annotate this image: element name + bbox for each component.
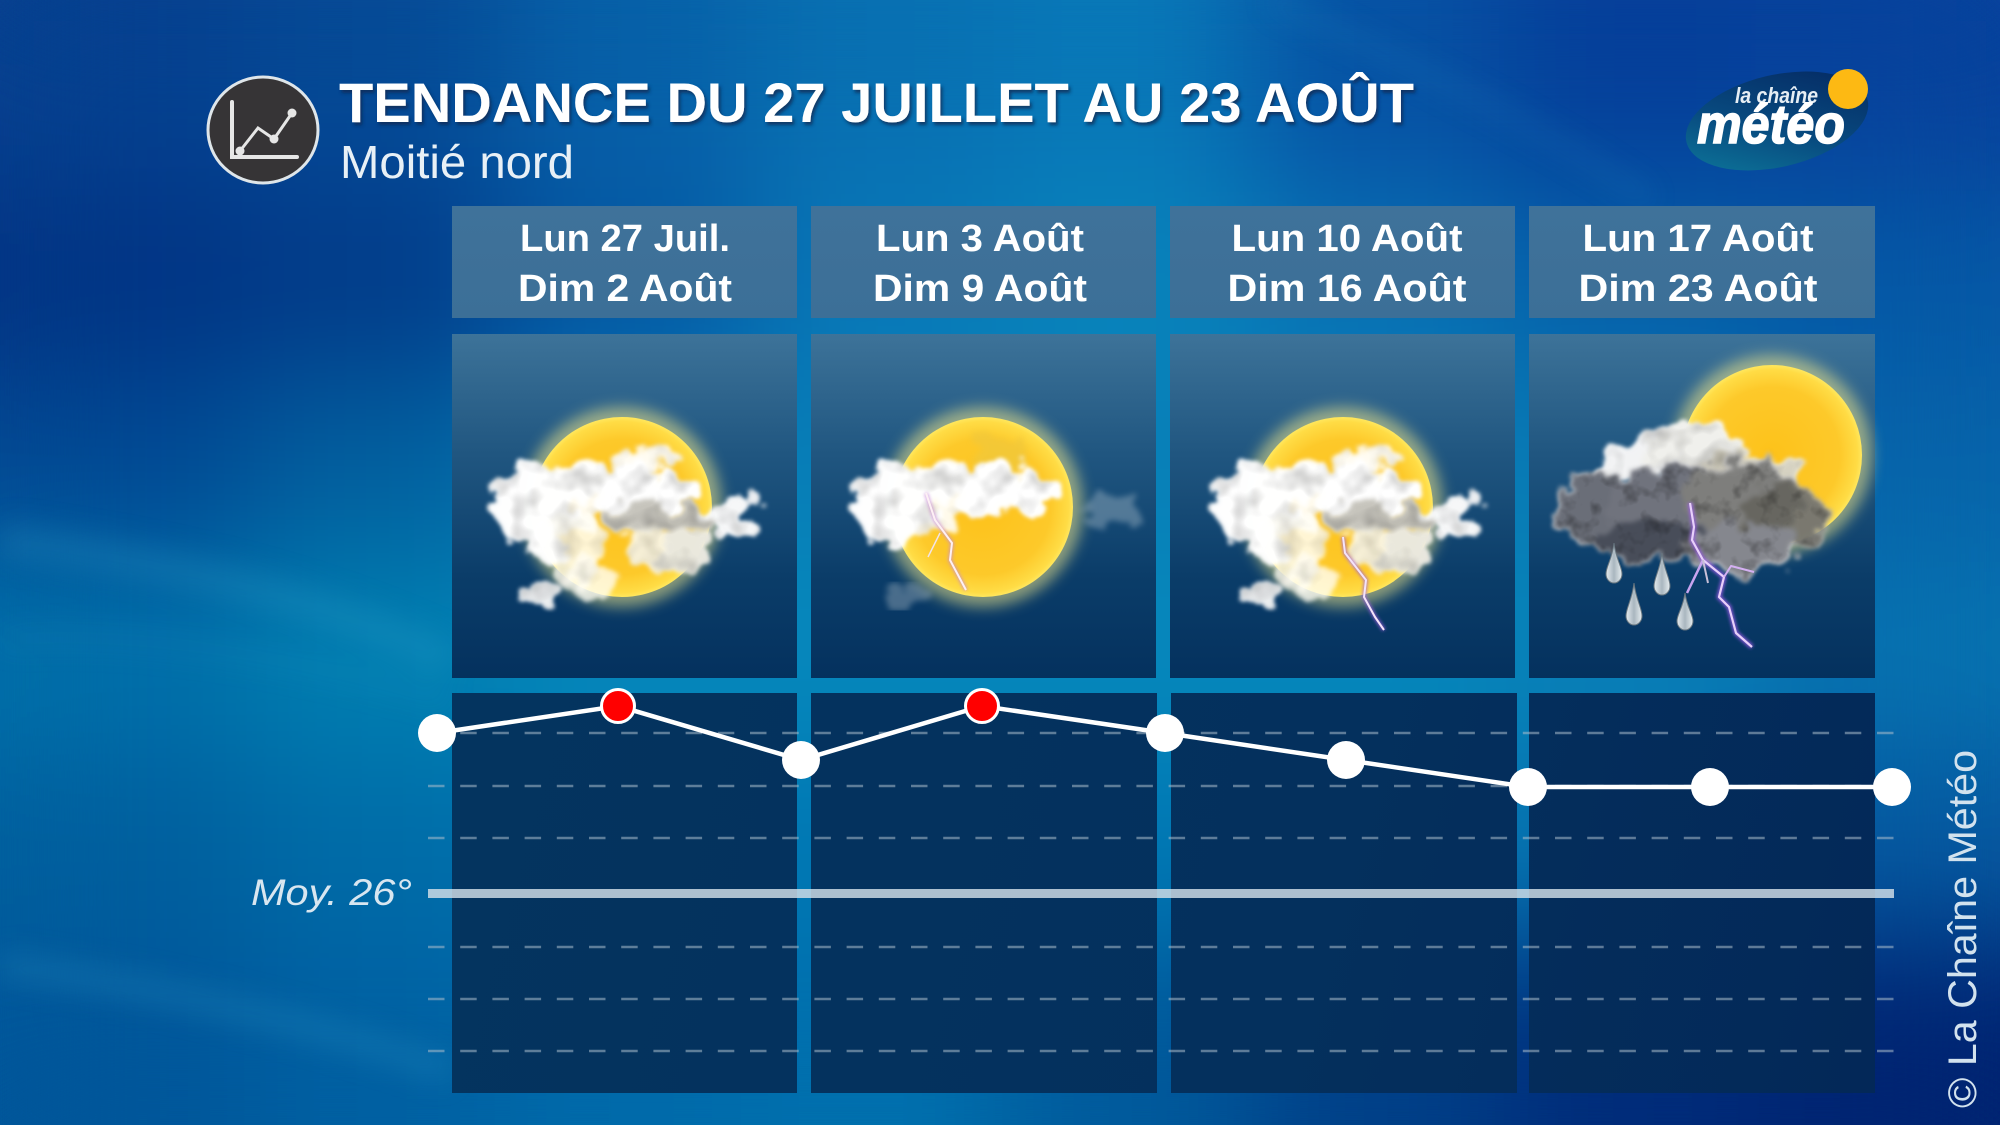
date header: week 4 [1529,206,1875,318]
subtitle: Moitié nord [340,136,574,188]
date header: week 4: Dim 23 Août [1578,268,1818,310]
date header: week 4: Lun 17 Août [1582,218,1814,260]
chart column 3 [1171,693,1517,1093]
trend line [437,706,1892,787]
panel: weather week 3, sun, cloud and lightning [1170,334,1515,678]
date header: week 1 [452,206,797,318]
date header: week 2 [811,206,1156,318]
date header: week 2: Dim 9 Août [873,268,1087,310]
date header: week 3: Dim 16 Août [1228,268,1467,310]
chart column 2 [811,693,1157,1093]
panel: temperature chart [418,690,1911,1093]
date header: week 1: Dim 2 Août [518,268,732,310]
copyright: © La Chaîne Météo [1941,750,1985,1108]
date header: week 1: Lun 27 Juil. [520,218,730,260]
logo: la chaîne météo [1676,55,1878,187]
logo: la chaîne météo: la chaîne [1735,83,1818,108]
panel: weather week 4, sun, storm cloud, rain and lightning [1529,334,1875,678]
panel: weather week 2, sun, cloud and lightning [811,334,1156,678]
date header: week 2: Lun 3 Août [876,218,1084,260]
average line [428,889,1894,898]
icon: trend chart badge [208,77,318,183]
title: TENDANCE DU 27 JUILLET AU 23 AOÛT [339,71,1414,134]
date header: week 3: Lun 10 Août [1232,218,1463,260]
date header: week 3 [1170,206,1515,318]
chart column 1 [452,693,797,1093]
data points [418,690,1911,806]
panel: weather week 1, sun and clouds [452,334,797,678]
chart column 4 [1529,693,1875,1093]
logo: la chaîne météo: météo [1697,93,1845,155]
average label: Moy. 26° [251,872,412,913]
icon: raindrops [1606,543,1693,630]
